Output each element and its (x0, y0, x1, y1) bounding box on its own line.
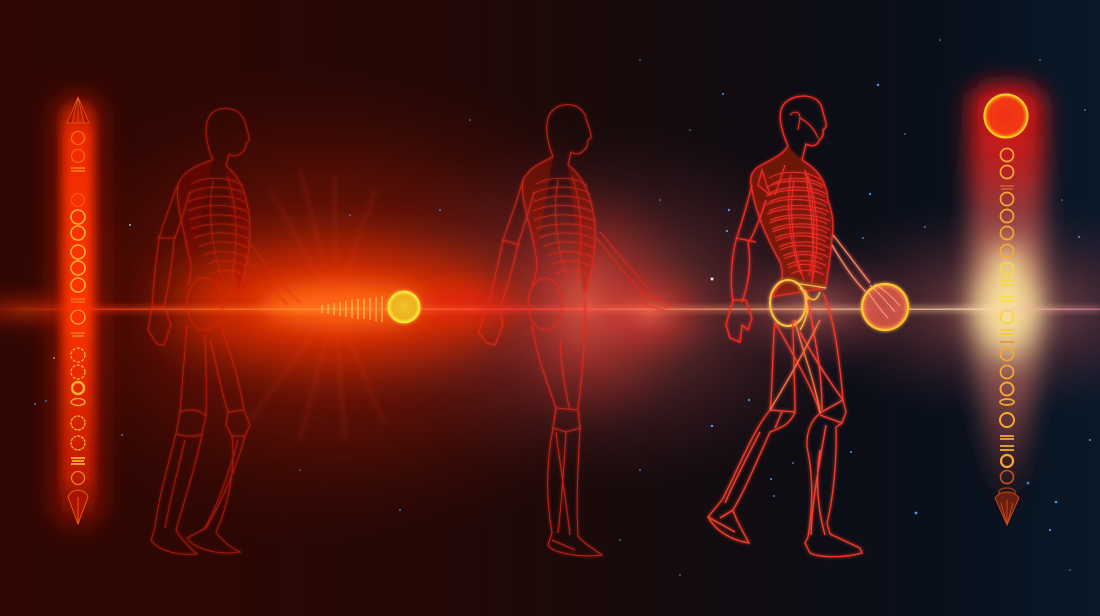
leg 1 (532, 300, 602, 556)
front leg (187, 325, 250, 553)
orb (388, 292, 420, 322)
head (206, 108, 249, 166)
column rings (999, 148, 1015, 496)
figure 3: bright walking body (708, 96, 908, 557)
horizontal light streak (0, 305, 1100, 313)
torso (177, 160, 250, 294)
back arm (478, 180, 534, 345)
column glow (50, 92, 106, 528)
column tip: bottom (68, 490, 88, 524)
soft light rays (250, 170, 385, 440)
right light column (969, 84, 1045, 526)
hip ring (187, 278, 223, 330)
sun orb (984, 94, 1028, 138)
hip ring (770, 280, 806, 326)
head (547, 105, 591, 165)
front arm (597, 232, 670, 310)
left light column (50, 92, 106, 528)
column rings (71, 132, 85, 484)
glow: background light bands (0, 65, 1100, 545)
torso (751, 146, 833, 297)
leg 2 (552, 340, 580, 550)
glow: burst around third figure hip (695, 246, 935, 370)
back leg (151, 325, 206, 554)
column tip: bottom (995, 492, 1019, 525)
back leg (708, 320, 795, 543)
glow: central orange burst (170, 170, 525, 440)
central orb with ticks (322, 292, 420, 322)
torso (522, 157, 595, 296)
hand orb (862, 284, 908, 330)
crossing thigh lines (770, 320, 820, 413)
tick marks (322, 296, 382, 322)
glow: pink burst behind second figure (475, 175, 705, 435)
back arm (726, 185, 766, 342)
column glow (969, 84, 1045, 526)
front leg (775, 293, 862, 557)
figure 1: faint side-on body (148, 108, 300, 554)
column tip: top (67, 97, 89, 123)
front arm (832, 235, 870, 292)
front arm (244, 240, 300, 305)
hip ring (528, 278, 562, 330)
back arm (148, 184, 190, 345)
glow: pink burst left of third figure (565, 252, 735, 372)
figure 2: mid-strength body (478, 105, 670, 556)
head (780, 96, 826, 160)
